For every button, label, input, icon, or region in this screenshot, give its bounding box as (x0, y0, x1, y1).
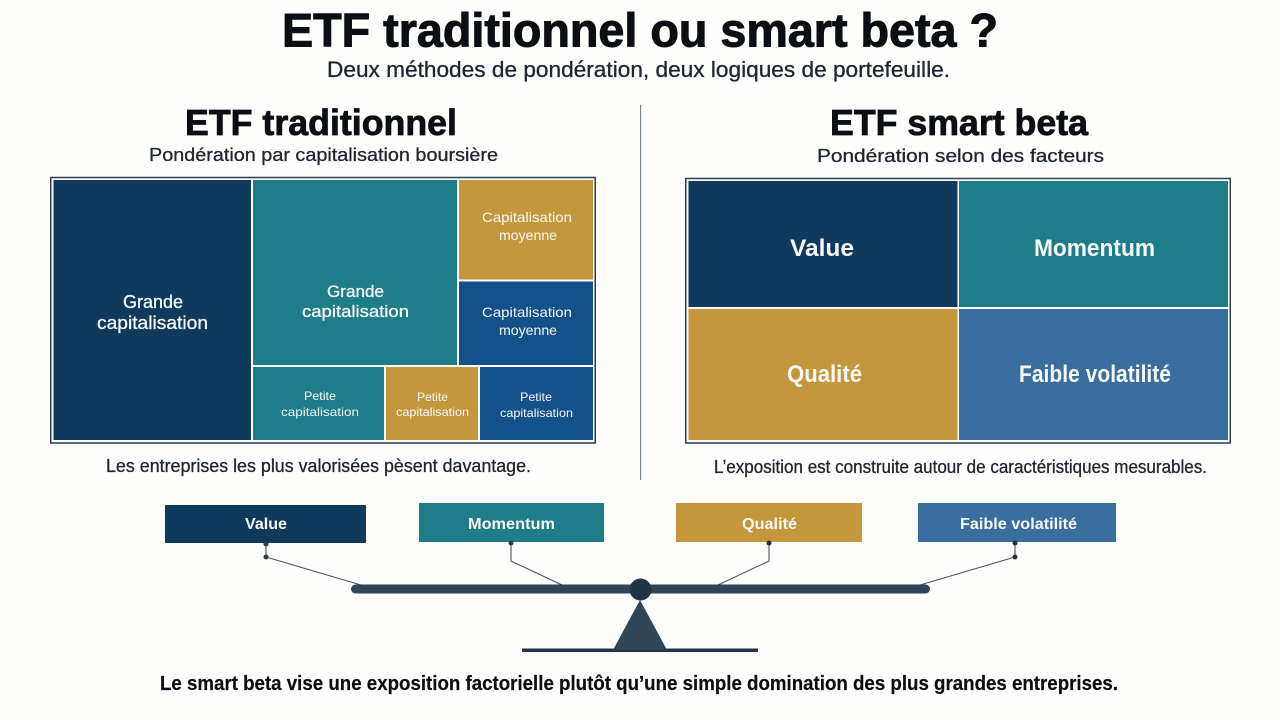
balance diagram (165, 503, 1116, 652)
balance pivot (630, 578, 652, 600)
cell: small cap teal (253, 367, 384, 440)
connector: Qualité to beam (718, 540, 772, 585)
factor grid (686, 178, 1230, 443)
subtitle: Deux méthodes de pondération, deux logiques de portefeuille. (327, 57, 950, 82)
panel: ETF traditionnel (51, 102, 595, 476)
connector: Momentum to beam (508, 540, 562, 585)
cell: small cap blue: Petite (520, 390, 552, 404)
factor label: Faible volatilité (918, 503, 1116, 542)
panel: ETF smart beta (686, 102, 1230, 477)
balance base line (522, 648, 758, 652)
cell: small cap teal: capitalisation (281, 405, 359, 419)
factor label: Qualité (676, 503, 862, 542)
cell: Momentum: Momentum (1034, 235, 1155, 262)
cell: Faible volatilité (959, 309, 1228, 440)
factor label: Value (165, 505, 366, 543)
cell: Value: Value (790, 235, 854, 262)
connector: Value to beam (264, 542, 361, 585)
cell: small cap blue (480, 367, 593, 440)
cell: Qualité: Qualité (787, 361, 862, 388)
balance beam (351, 584, 930, 594)
conclusion: Le smart beta vise une exposition factorielle plutôt qu’une simple domination des plus grandes entreprises. (160, 672, 1118, 695)
factor label: Faible volatilité: Faible volatilité (960, 516, 1077, 533)
subheading: factor weighting: Pondération selon des facteurs (817, 145, 1104, 166)
cell: mid cap blue: moyenne (499, 322, 557, 338)
connector: Faible volatilité to beam (920, 540, 1018, 585)
cell: large cap navy: Grande (123, 292, 183, 312)
cell: large cap teal: Grande (327, 282, 384, 301)
cell: mid cap gold (459, 180, 593, 280)
factor label: Momentum: Momentum (468, 516, 555, 533)
cell: small cap gold (386, 367, 478, 440)
cell: Momentum (959, 181, 1228, 307)
heading: ETF traditionnel: ETF traditionnel (185, 102, 457, 143)
factor label: Value: Value (245, 516, 287, 533)
cell: small cap gold: capitalisation (396, 405, 469, 419)
caption: smart beta ETF: L’exposition est construite autour de caractéristiques mesurables. (714, 457, 1207, 477)
title: ETF traditionnel ou smart beta ? (282, 4, 998, 56)
cell: large cap teal: capitalisation (302, 302, 409, 321)
treemap: market capitalisation weights (51, 178, 595, 443)
cell: large cap navy (54, 180, 251, 440)
cell: mid cap gold: moyenne (499, 227, 557, 243)
cell: large cap navy: capitalisation (97, 313, 208, 333)
cell: Faible volatilité: Faible volatilité (1019, 361, 1171, 388)
caption: traditional ETF: Les entreprises les plus valorisées pèsent davantage. (106, 456, 531, 476)
cell: small cap teal: Petite (304, 389, 336, 403)
factor label: Momentum (419, 503, 604, 542)
cell: small cap blue: capitalisation (500, 406, 573, 420)
balance fulcrum (613, 600, 667, 650)
cell: large cap teal (253, 180, 457, 365)
cell: mid cap blue: Capitalisation (482, 304, 572, 320)
subheading: capitalisation weighting: Pondération par capitalisation boursière (149, 144, 498, 165)
cell: Value (688, 181, 958, 307)
heading: ETF smart beta: ETF smart beta (830, 102, 1089, 143)
factor label: Qualité: Qualité (742, 516, 797, 533)
cell: mid cap gold: Capitalisation (482, 209, 572, 225)
cell: small cap gold: Petite (417, 390, 448, 404)
cell: Qualité (688, 309, 958, 440)
cell: mid cap blue (459, 282, 593, 365)
